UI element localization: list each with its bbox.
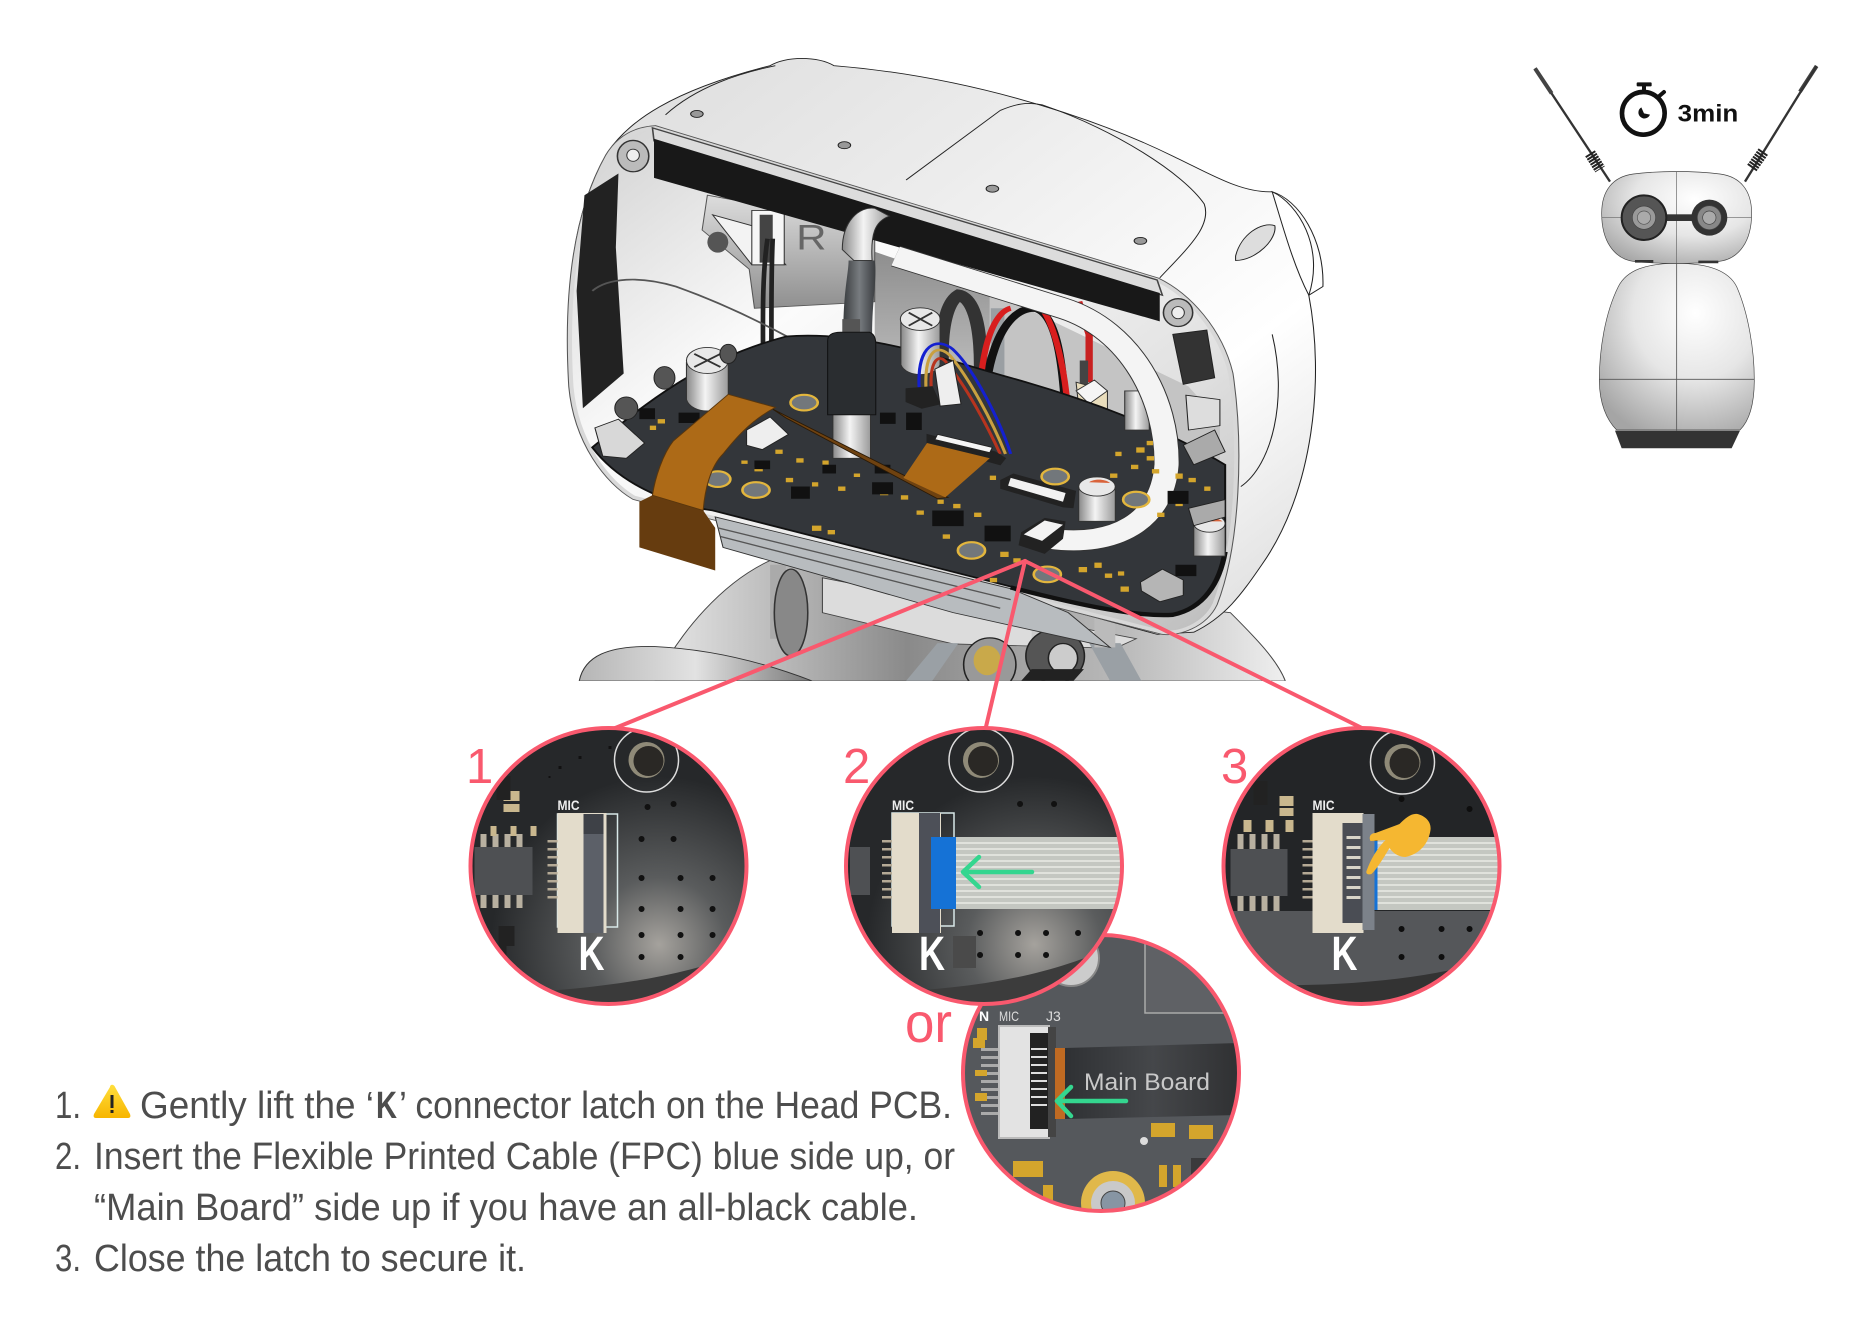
- silk label MIC: MIC: [1312, 797, 1334, 813]
- detail circle 4: all-black cable on main board: J3: [1046, 1008, 1061, 1024]
- ribbon cable: [931, 837, 1126, 909]
- instruction list: K: [376, 1085, 397, 1127]
- head: [1602, 171, 1752, 263]
- instruction list: 3.: [55, 1238, 81, 1280]
- instruction list: [55, 1085, 955, 1280]
- stand bracket: [822, 578, 1136, 648]
- power connectors: [1075, 380, 1108, 408]
- step number 3: 3: [1221, 740, 1248, 794]
- eyes: [1622, 195, 1727, 240]
- shell seams and details: [666, 66, 1314, 487]
- silk label K: K: [1332, 928, 1358, 981]
- PCB front edge and heatsink: [715, 517, 1225, 647]
- rear wires: [592, 238, 1093, 395]
- detail circle 4: all-black cable on main board: N: [979, 1008, 989, 1024]
- detail circle 1: lift latch: [468, 726, 748, 1006]
- large capacitors: [686, 308, 1225, 556]
- instruction list: Gently lift the ‘: [140, 1085, 374, 1127]
- USB cable and connector: [828, 260, 876, 458]
- mounting hole: [949, 728, 1013, 792]
- green arrow: [963, 857, 1032, 887]
- mounting hole: [1370, 730, 1434, 794]
- silk label MIC: MIC: [892, 797, 914, 813]
- detail circle 4: all-black cable on main board: [961, 928, 1241, 1235]
- silk label K: K: [919, 928, 945, 981]
- silk label K: K: [578, 928, 605, 981]
- head shell: [569, 58, 1323, 634]
- corner mount right: [1163, 299, 1193, 327]
- gold ring: [1081, 1171, 1145, 1209]
- time label: 3min: [1678, 101, 1738, 128]
- detail circle 3: close latch: [1222, 726, 1504, 1006]
- neck post and screws: [770, 565, 1141, 692]
- IC: [474, 791, 536, 908]
- cable clip: [842, 208, 889, 260]
- board switches and blocks: [595, 330, 1225, 602]
- instruction list: Close the latch to secure it.: [94, 1238, 526, 1280]
- small blue, yellow and red harness: [919, 344, 1011, 454]
- mounting hole: [614, 728, 678, 792]
- foreground dish: [579, 646, 812, 681]
- illustration: robot head with open cavity and PCB: [569, 58, 1323, 692]
- main PCB: [592, 336, 1225, 616]
- instruction list: Insert the Flexible Printed Cable (FPC) blue side up, or: [94, 1136, 955, 1178]
- left black panel: [577, 173, 624, 408]
- connector open latch: [548, 813, 618, 933]
- top black bar: [652, 128, 1162, 321]
- robot overview with time badge: [1535, 66, 1817, 448]
- label: Main Board: Main Board: [1084, 1069, 1210, 1096]
- cavity rim: [570, 128, 1236, 633]
- ribbon cable: [1372, 837, 1504, 910]
- icon: warning triangle: [94, 1085, 130, 1118]
- detail circle 2: insert cable: [844, 726, 1126, 1006]
- white flexible ribbon cable: [896, 256, 1167, 540]
- head seams: [1602, 172, 1752, 263]
- connector closed latch: [1302, 813, 1374, 933]
- icon: pointing hand: [1366, 814, 1431, 874]
- or label: or: [905, 991, 952, 1054]
- base: [1615, 431, 1740, 448]
- icon: stopwatch: [1622, 82, 1665, 135]
- connector: [882, 813, 954, 933]
- instruction list: 1.: [55, 1085, 81, 1127]
- instruction list: 2.: [55, 1136, 81, 1178]
- black board connector: [1000, 473, 1076, 554]
- silk label MIC: MIC: [558, 797, 580, 813]
- gold mounting rings: [705, 395, 1149, 582]
- step number 2: 2: [843, 740, 870, 794]
- corner mount left: [617, 140, 649, 172]
- body seams: [1599, 263, 1754, 431]
- black SMD chips: [639, 408, 1196, 576]
- instruction list: “Main Board” side up if you have an all-black cable.: [94, 1187, 918, 1229]
- base dome below head: [655, 560, 1285, 681]
- harness connector: [906, 360, 1005, 465]
- green arrow: [1057, 1087, 1126, 1116]
- pointer lines from connector to detail circles: [603, 561, 1372, 733]
- rear interior shading: [990, 291, 1220, 465]
- gold SMD components: [647, 413, 1210, 592]
- chin feet: [1635, 260, 1718, 263]
- orange flexible cable: [639, 394, 990, 570]
- IC: [1230, 781, 1294, 911]
- cavity interior: [570, 128, 1236, 633]
- rear bracket with R mark: R: [796, 219, 826, 258]
- detail circle 4: all-black cable on main board: MIC: [999, 1008, 1019, 1024]
- step number 1: 1: [466, 740, 493, 794]
- body: [1599, 263, 1754, 430]
- central rear wall: [874, 252, 990, 366]
- rear bracket with R mark: [702, 195, 875, 308]
- antennas: [1535, 66, 1817, 182]
- instruction list: ’ connector latch on the Head PCB.: [399, 1085, 952, 1127]
